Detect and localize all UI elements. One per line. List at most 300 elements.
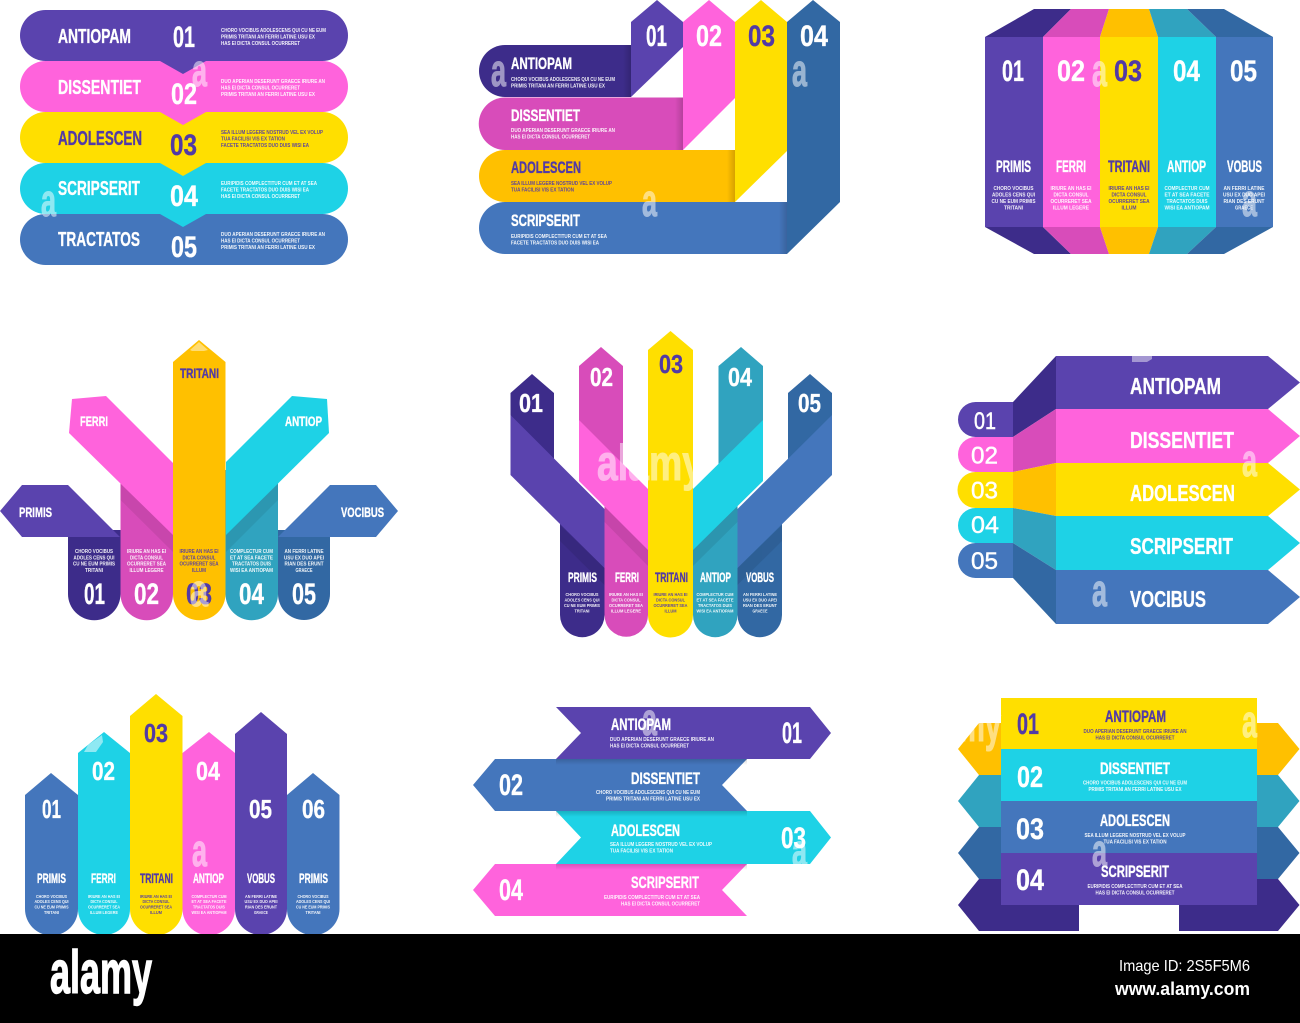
column 04 antiop: COMPLECTUR CUM	[192, 894, 226, 900]
ribbon 03 adolescen	[479, 0, 787, 202]
upper hex 01: 01	[519, 388, 543, 418]
watermark glyphs	[41, 45, 1258, 876]
card row 01 antiopam: DUO APERIAN DESERUNT GRAECE IRIURE AN	[1084, 729, 1187, 735]
banner 01 antiopam: 01	[782, 717, 802, 750]
ribbon 04 scripserit: SCRIPSERIT	[511, 212, 580, 230]
row 02 dissentiet: 02	[171, 78, 197, 111]
number pill 04	[958, 508, 1013, 543]
number pill 02: 02	[971, 442, 998, 470]
lower tab vobus: GRAECE	[752, 608, 768, 614]
panel: stacked card with side arrows	[958, 698, 1300, 931]
tab 02	[120, 470, 173, 620]
watermark glyphs: a	[1092, 45, 1108, 96]
column 04 antiop	[1158, 37, 1216, 227]
card row 02 dissentiet: 02	[1017, 761, 1043, 794]
banner 04 scripserit: SCRIPSERIT	[631, 874, 699, 892]
tab 02: DICTA CONSUL	[130, 555, 164, 561]
watermark glyphs: a	[491, 45, 507, 96]
card row 04 scripserit: SCRIPSERIT	[1101, 863, 1169, 881]
watermark glyphs: a	[792, 45, 808, 96]
number pill 05	[958, 543, 1013, 578]
column 04 antiop: ANTIOP	[1167, 158, 1206, 176]
watermark glyphs: my	[959, 699, 1001, 752]
row 01 antiopam: 01	[173, 21, 195, 54]
tab 01: CU NE EUM PRIMIS	[73, 562, 115, 568]
lower tab vobus: USU EX DUO APEI	[743, 598, 778, 604]
arrow antiop	[226, 396, 329, 535]
banner 02 dissentiet: 02	[499, 769, 523, 802]
central column tritani: OCURRERET SEA	[180, 562, 219, 568]
lower tab ferri: ILLUM LEGERE	[611, 608, 642, 614]
column 03 tritani: DICTA CONSUL	[142, 899, 170, 905]
banner 04 scripserit: 04	[499, 874, 523, 907]
column 01 primis: CHORO VOCIBUS	[36, 894, 68, 900]
ribbon 01 antiopam: PRIMIS TRITANI AN FERRI LATINE USU EX	[511, 84, 605, 90]
arrow antiopam: ANTIOPAM	[1130, 373, 1221, 399]
column 02 ferri: IRIURE AN HAS EI	[1050, 186, 1092, 192]
banner 04 scripserit	[473, 864, 747, 916]
column 03 tritani: 03	[144, 718, 168, 748]
number pill 03	[958, 472, 1013, 508]
lower tab vobus: VOBUS	[746, 569, 774, 585]
image id: Image ID: 2S5F5M6	[1119, 958, 1250, 975]
tab 04: TRACTATOS DUIS	[232, 562, 271, 568]
card row 03 adolescen	[1001, 801, 1257, 853]
card row 02 dissentiet: CHORO VOCIBUS ADOLESCENS QUI CU NE EUM	[1083, 780, 1187, 786]
banner 02 dissentiet: CHORO VOCIBUS ADOLESCENS QUI CU NE EUM	[596, 790, 700, 796]
ribbon 04 scripserit: FACETE TRACTATOS DUO DUIS WISI EA	[511, 240, 599, 246]
row 01 antiopam: HAS EI DICTA CONSUL OCURRERET	[221, 41, 301, 47]
arrow scripserit	[1056, 516, 1300, 570]
arrow primis: PRIMIS	[19, 504, 52, 520]
column 06 primis	[287, 773, 340, 935]
row 03 adolescen: 03	[170, 129, 197, 162]
column 03 tritani: IRIURE AN HAS EI	[1108, 186, 1150, 192]
row 03 adolescen: TUA FACILISI VIS EX TATION	[221, 136, 285, 142]
watermark glyphs: a	[1092, 825, 1108, 876]
fold shadow pink	[120, 484, 173, 552]
column 01 primis: 01	[42, 794, 61, 824]
tab 02: 02	[134, 578, 159, 611]
row 05 tractatos: HAS EI DICTA CONSUL OCURRERET	[221, 238, 301, 244]
column 04 antiop: ANTIOP	[193, 870, 224, 886]
tab 05: GRAECE	[296, 568, 313, 574]
column 03 tritani	[130, 694, 182, 935]
column 02 ferri: 02	[92, 756, 115, 786]
row 04 scripserit: FACETE TRACTATOS DUO DUIS WISI EA	[221, 188, 309, 194]
tab 05: RIAN DES ERUNT	[284, 562, 324, 568]
ribbon 01 antiopam	[479, 0, 683, 97]
tab 05: AN FERRI LATINE	[284, 549, 324, 555]
fold shadow cyan	[226, 484, 278, 552]
upper hex 01	[510, 374, 554, 470]
ribbon 03 adolescen: SEA ILLUM LEGERE NOSTRUD VEL EX VOLUP	[511, 181, 612, 187]
central column tritani	[173, 340, 226, 620]
column 03 tritani: OCURRERET SEA	[140, 904, 172, 910]
column 02 ferri: 02	[1057, 55, 1085, 88]
card row 01 antiopam	[1001, 698, 1257, 749]
banner 01 antiopam: ANTIOPAM	[611, 716, 671, 734]
column 01 primis	[985, 37, 1043, 227]
row 03 adolescen	[20, 112, 348, 176]
column 04 antiop: ET AT SEA FACETE	[192, 899, 227, 905]
footer bar	[0, 934, 1300, 1023]
watermark glyphs: a	[1242, 435, 1258, 486]
banner 02 dissentiet	[473, 759, 747, 811]
row 04 scripserit	[20, 163, 348, 227]
column 05 vobus: RIAN DES ERUNT	[245, 904, 277, 910]
watermark glyphs: a	[1092, 565, 1108, 616]
card row 01 antiopam: HAS EI DICTA CONSUL OCURRERET	[1096, 736, 1175, 742]
column 05 vobus	[235, 712, 287, 935]
ribbon 02 dissentiet: DUO APERIAN DESERUNT GRAECE IRIURE AN	[511, 128, 615, 134]
column 05 vobus: AN FERRI LATINE	[245, 894, 278, 900]
tab 01: CHORO VOCIBUS	[75, 549, 113, 555]
tab 01: 01	[84, 578, 105, 611]
tab 04: WISI EA ANTIOPAM	[230, 568, 273, 574]
tab 05: 05	[292, 578, 316, 611]
central column 03: TRITANI	[655, 569, 688, 585]
panel: folded ribbons with top tabs	[479, 0, 840, 254]
column 02 ferri	[1043, 37, 1100, 227]
column 02 ferri	[78, 732, 130, 935]
column 05 vobus: USU EX DUO APEI	[1223, 192, 1265, 198]
watermark glyphs: a	[642, 175, 658, 226]
arrow dissentiet: DISSENTIET	[1130, 427, 1234, 453]
row 05 tractatos: PRIMIS TRITANI AN FERRI LATINE USU EX	[221, 245, 315, 251]
row 04 scripserit: EURIPIDIS COMPLECTITUR CUM ET AT SEA	[221, 181, 317, 187]
number pill 02	[958, 437, 1013, 472]
column 04 antiop: WISI EA ANTIOPAM	[192, 910, 227, 916]
banner 01 antiopam	[556, 707, 831, 759]
ribbon 02 dissentiet: HAS EI DICTA CONSUL OCURRERET	[511, 134, 591, 140]
column 03 tritani: IRIURE AN HAS EI	[140, 894, 173, 900]
column 01 primis: 01	[1002, 55, 1024, 88]
central column 03: IRIURE AN HAS EI	[654, 592, 688, 598]
central column 03: 03	[659, 349, 683, 379]
ribbon 01 antiopam: ANTIOPAM	[511, 55, 572, 73]
column 06 primis: PRIMIS	[299, 870, 328, 886]
card row 02 dissentiet	[1001, 749, 1257, 801]
column 02 ferri: OCURRERET SEA	[1050, 199, 1092, 205]
upper hex 04: 04	[728, 362, 752, 392]
card row 02 dissentiet: PRIMIS TRITANI AN FERRI LATINE USU EX	[1088, 787, 1182, 793]
band blue	[738, 415, 832, 568]
arrow adolescen	[1056, 463, 1300, 516]
arrow antiopam	[1056, 356, 1300, 409]
tab 01: TRITANI	[85, 568, 103, 574]
column 02 ferri: ILLUM LEGERE	[1053, 206, 1089, 212]
lower tab ferri	[604, 495, 648, 637]
column 05 vobus: USU EX DUO APEI	[244, 899, 278, 905]
column 01 primis: PRIMIS	[37, 870, 66, 886]
arrow ferri	[69, 396, 173, 535]
number pill 01	[958, 402, 1013, 437]
card row 01 antiopam: 01	[1017, 708, 1039, 741]
lower tab primis: TRITANI	[574, 608, 590, 614]
column 03 tritani: TRITANI	[1108, 158, 1150, 176]
ribbon 03 adolescen: 03	[748, 20, 775, 53]
right side arrows	[1179, 723, 1300, 931]
banner 04 scripserit: HAS EI DICTA CONSUL OCURRERET	[621, 902, 701, 908]
tab 01: ADOLES CENS QUI	[74, 555, 115, 561]
ribbon 04 scripserit: 04	[800, 20, 828, 53]
banner 03 adolescen: TUA FACILISI VIS EX TATION	[610, 848, 673, 854]
column 04 antiop: ET AT SEA FACETE	[1164, 192, 1210, 198]
banner 03 adolescen: 03	[781, 822, 806, 855]
row 05 tractatos	[20, 214, 348, 265]
upper hex 05	[788, 374, 832, 470]
column 06 primis: CU NE EUM PRIMIS	[296, 904, 331, 910]
row 04 scripserit: 04	[170, 180, 198, 213]
column 05 vobus: 05	[249, 794, 272, 824]
column 05 vobus: 05	[1230, 55, 1257, 88]
column 01 primis: CU NE EUM PRIMIS	[34, 904, 69, 910]
alamy logo: alamy	[50, 939, 152, 1006]
banner 01 antiopam: HAS EI DICTA CONSUL OCURRERET	[610, 744, 690, 750]
watermark glyphs: a	[792, 825, 808, 876]
ribbon 02 dissentiet	[479, 0, 735, 150]
tab 04: ET AT SEA FACETE	[230, 555, 273, 561]
column 01 primis: PRIMIS	[996, 158, 1031, 176]
ribbon 02 dissentiet: 02	[696, 20, 722, 53]
column 04 antiop: COMPLECTUR CUM	[1164, 186, 1210, 192]
watermark glyphs: a	[642, 694, 658, 745]
upper hex 04	[718, 347, 763, 470]
lower tab vobus: RIAN DES ERUNT	[743, 603, 777, 609]
ribbon 01 antiopam: 01	[646, 20, 667, 53]
tab 05	[278, 530, 330, 620]
shadow under banner 02	[556, 811, 747, 817]
column 02 ferri: DICTA CONSUL	[1054, 192, 1089, 198]
banner 03 adolescen: ADOLESCEN	[611, 822, 680, 840]
column 03 tritani	[1100, 37, 1158, 227]
banner 02 dissentiet: PRIMIS TRITANI AN FERRI LATINE USU EX	[606, 796, 700, 802]
column 03 tritani: ILLUM	[150, 910, 162, 916]
column 02 ferri: ILLUM LEGERE	[90, 910, 119, 916]
row 02 dissentiet: DISSENTIET	[58, 76, 141, 99]
row 01 antiopam: PRIMIS TRITANI AN FERRI LATINE USU EX	[221, 34, 315, 40]
column 06 primis: CHORO VOCIBUS	[298, 894, 329, 900]
card row 04 scripserit: 04	[1016, 864, 1044, 897]
central column tritani: IRIURE AN HAS EI	[180, 549, 219, 555]
row 01 antiopam: CHORO VOCIBUS ADOLESCENS QUI CU NE EUM	[221, 28, 326, 34]
arrow adolescen: ADOLESCEN	[1130, 480, 1235, 506]
column 01 primis: TRITANI	[1004, 206, 1023, 212]
tab 04	[226, 470, 278, 620]
left side arrows	[958, 723, 1079, 931]
lower tab primis: CHORO VOCIBUS	[566, 592, 599, 598]
tab 02: ILLUM LEGERE	[130, 568, 164, 574]
central column tritani: DICTA CONSUL	[182, 555, 216, 561]
card row 03 adolescen: 03	[1016, 813, 1044, 846]
column 04 antiop: WISI EA ANTIOPAM	[1164, 206, 1210, 212]
row 02 dissentiet	[20, 61, 348, 125]
card row 04 scripserit: HAS EI DICTA CONSUL OCURRERET	[1096, 890, 1175, 896]
watermark glyphs: a	[192, 45, 208, 96]
central column 03	[648, 331, 693, 638]
arrow primis	[0, 485, 120, 537]
arrow antiop: ANTIOP	[285, 413, 322, 429]
lower tab antiop: ANTIOP	[700, 569, 731, 585]
site url: www.alamy.com	[1114, 979, 1250, 999]
column 05 vobus: GRAECE	[254, 910, 269, 916]
tab 05: USU EX DUO APEI	[284, 555, 324, 561]
lower tab primis: CU NE EUM PRIMIS	[564, 603, 601, 609]
panel: five column box	[985, 9, 1273, 254]
row 03 adolescen: ADOLESCEN	[58, 127, 142, 150]
ribbon 03 adolescen: ADOLESCEN	[511, 159, 581, 177]
watermark glyphs: a	[1242, 175, 1258, 226]
panel: five arrows with number pills	[958, 356, 1300, 624]
column 02 ferri: OCURRERET SEA	[88, 904, 120, 910]
band cyan	[693, 420, 763, 550]
column 01 primis: CU NE EUM PRIMIS	[992, 199, 1036, 205]
watermark glyphs: a	[190, 565, 209, 616]
band purple	[510, 415, 604, 568]
number pill 01: 01	[974, 408, 996, 435]
banner 02 dissentiet: DISSENTIET	[631, 770, 700, 788]
column 03 tritani: TRITANI	[140, 870, 173, 886]
lower tab primis: PRIMIS	[568, 569, 597, 585]
upper hex 02	[579, 347, 623, 470]
tab 02: IRIURE AN HAS EI	[127, 549, 166, 555]
row 02 dissentiet: PRIMIS TRITANI AN FERRI LATINE USU EX	[221, 92, 315, 98]
lower tab antiop: COMPLECTUR CUM	[696, 592, 734, 598]
row 01 antiopam	[20, 10, 348, 74]
row 01 antiopam: ANTIOPAM	[58, 25, 131, 48]
column 04 antiop	[182, 732, 235, 935]
lower tab vobus	[738, 520, 782, 637]
number pill 04: 04	[971, 512, 999, 539]
shadow under banner 01	[556, 759, 747, 765]
card row 03 adolescen: ADOLESCEN	[1100, 812, 1170, 830]
central column tritani: TRITANI	[180, 365, 219, 381]
column 03 tritani: ILLUM	[1122, 206, 1137, 212]
banner 01 antiopam: DUO APERIAN DESERUNT GRAECE IRIURE AN	[610, 737, 714, 743]
lower tab antiop	[693, 495, 738, 637]
column 01 primis	[25, 773, 78, 936]
banner 03 adolescen	[556, 811, 831, 864]
column 02 ferri: DICTA CONSUL	[90, 899, 118, 905]
row 05 tractatos: TRACTATOS	[58, 228, 140, 251]
column 02 ferri: IRIURE AN HAS EI	[88, 894, 121, 900]
ribbon 01 antiopam: CHORO VOCIBUS ADOLESCENS QUI CU NE EUM	[511, 77, 615, 83]
lower tab ferri: IRIURE AN HAS EI	[609, 592, 644, 598]
card row 03 adolescen: TUA FACILISI VIS EX TATION	[1104, 840, 1167, 846]
banner 03 adolescen: SEA ILLUM LEGERE NOSTRUD VEL EX VOLUP	[610, 842, 712, 848]
panel: six upward arrow columns	[25, 694, 340, 936]
lower tab antiop: ET AT SEA FACETE	[696, 598, 734, 604]
watermark glyphs: a	[1242, 696, 1258, 747]
panel: stacked pills list	[20, 10, 348, 265]
column 02 ferri: FERRI	[91, 870, 116, 886]
column 01 primis: ADOLES CENS QUI	[34, 899, 69, 905]
central column 03: ILLUM	[664, 608, 677, 614]
lower tab ferri: DICTA CONSUL	[612, 598, 641, 604]
lower tab vobus: AN FERRI LATINE	[743, 592, 778, 598]
column 02 ferri: FERRI	[1056, 158, 1086, 176]
column 04 antiop: TRACTATOS DUIS	[193, 904, 226, 910]
watermark glyphs: alamy	[597, 435, 703, 491]
column 03 tritani: 03	[1114, 55, 1142, 88]
column 06 primis: 06	[302, 794, 325, 824]
column 04 antiop: 04	[196, 756, 220, 786]
watermark glyphs: a	[192, 825, 208, 876]
tab 02: OCURRERET SEA	[127, 562, 166, 568]
number pill 05: 05	[971, 548, 998, 575]
arrow vocibus: VOCIBUS	[1130, 586, 1206, 612]
tab 04: COMPLECTUR CUM	[230, 549, 273, 555]
column 01 primis: CHORO VOCIBUS	[994, 186, 1034, 192]
card row 04 scripserit: EURIPIDIS COMPLECTITUR CUM ET AT SEA	[1088, 884, 1183, 890]
lower tab primis	[560, 520, 604, 637]
tab 04: 04	[239, 578, 264, 611]
column 05 vobus: RIAN DES ERUNT	[1224, 199, 1265, 205]
row 02 dissentiet: HAS EI DICTA CONSUL OCURRERET	[221, 86, 301, 92]
row 05 tractatos: 05	[171, 231, 197, 264]
upper hex 05: 05	[798, 388, 821, 418]
central column tritani: ILLUM	[192, 568, 206, 574]
connector strips	[1013, 356, 1056, 624]
card row 03 adolescen: SEA ILLUM LEGERE NOSTRUD VEL EX VOLUP	[1084, 833, 1186, 839]
ribbon 04 scripserit: EURIPIDIS COMPLECTITUR CUM ET AT SEA	[511, 234, 607, 240]
column 03 tritani: DICTA CONSUL	[1112, 192, 1147, 198]
arrow ferri: FERRI	[80, 413, 108, 429]
panel: crossed hand ribbons	[510, 331, 832, 638]
lower tab antiop: TRACTATOS DUIS	[698, 603, 733, 609]
lower tab ferri: FERRI	[615, 569, 639, 585]
row 02 dissentiet: DUO APERIAN DESERUNT GRAECE IRIURE AN	[221, 79, 325, 85]
lower tab primis: ADOLES CENS QUI	[564, 598, 600, 604]
column 01 primis: TRITANI	[44, 910, 60, 916]
arrow vocibus	[1056, 570, 1300, 624]
column 04 antiop: 04	[1173, 55, 1200, 88]
tab 01	[68, 530, 120, 620]
fold shadows on lower tabs	[560, 506, 782, 585]
lower tab antiop: WISI EA ANTIOPAM	[696, 608, 734, 614]
number pill 03: 03	[971, 478, 998, 504]
row 03 adolescen: SEA ILLUM LEGERE NOSTRUD VEL EX VOLUP	[221, 130, 323, 136]
panel: alternating ribbon banners	[473, 707, 831, 916]
watermark glyphs: a	[41, 175, 57, 226]
central column tritani: 03	[186, 578, 212, 611]
shadow under banner 03	[556, 864, 747, 870]
column 06 primis: TRITANI	[306, 910, 321, 916]
top bevel strips	[985, 9, 1273, 37]
ribbon 03 adolescen: TUA FACILISI VIS EX TATION	[511, 188, 574, 194]
banner 04 scripserit: EURIPIDIS COMPLECTITUR CUM ET AT SEA	[604, 895, 700, 901]
column 04 antiop: TRACTATOS DUIS	[1166, 199, 1208, 205]
arrow scripserit: SCRIPSERIT	[1130, 533, 1233, 559]
card row 01 antiopam: ANTIOPAM	[1105, 708, 1166, 726]
arrow vocibus: VOCIBUS	[341, 504, 384, 520]
arrow dissentiet	[1056, 409, 1300, 463]
ribbon 04 scripserit	[479, 0, 840, 254]
card row 02 dissentiet: DISSENTIET	[1100, 760, 1170, 778]
band pink	[579, 420, 648, 550]
card row 04 scripserit	[1001, 853, 1257, 905]
bottom bevel strips	[985, 227, 1273, 254]
panel: fan of arrows with bottom tabs	[0, 340, 398, 620]
lower tab ferri: OCURRERET SEA	[609, 603, 643, 609]
column 01 primis: ADOLES CENS QUI	[992, 192, 1035, 198]
column 06 primis: ADOLES CENS QUI	[296, 899, 331, 905]
central column 03: DICTA CONSUL	[656, 598, 685, 604]
column 05 vobus: VOBUS	[1227, 158, 1262, 176]
arrow vocibus	[278, 485, 398, 537]
upper hex 02: 02	[590, 362, 613, 392]
